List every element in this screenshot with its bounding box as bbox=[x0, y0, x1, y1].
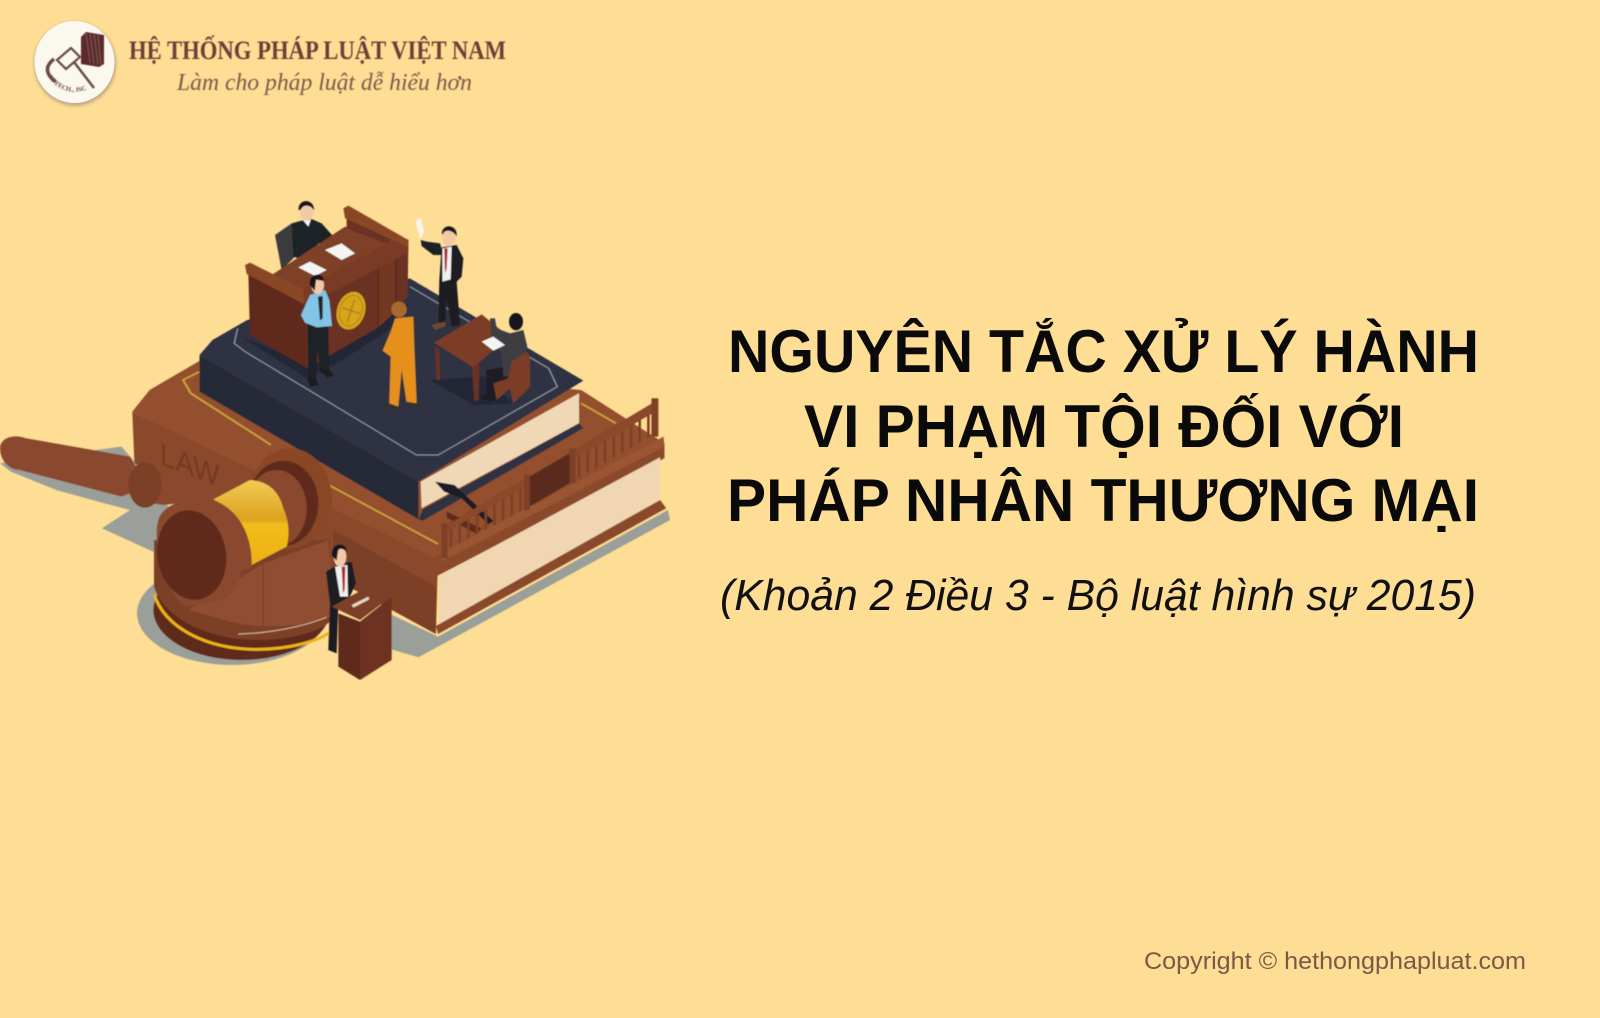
gavel handle bbox=[0, 436, 147, 497]
gavel head bbox=[150, 448, 332, 607]
judge bbox=[275, 201, 335, 270]
title: NGUYÊN TẮC XỬ LÝ HÀNH bbox=[728, 318, 1479, 385]
gavel handle collar bbox=[128, 462, 222, 508]
defence table and lawyer bbox=[430, 313, 530, 405]
title: PHÁP NHÂN THƯƠNG MẠI bbox=[727, 467, 1479, 534]
upper navy book bbox=[200, 278, 583, 534]
copyright: Copyright © hethongphapluat.com bbox=[1144, 948, 1526, 975]
defendant in orange bbox=[383, 301, 417, 410]
subtitle: (Khoản 2 Điều 3 - Bộ luật hình sự 2015) bbox=[720, 571, 1476, 620]
security guard bbox=[301, 275, 334, 387]
prosecutor bbox=[415, 217, 463, 330]
scales emblem bbox=[332, 288, 370, 333]
illustration: courtroom on law books with gavel bbox=[0, 201, 670, 680]
courtroom scene on the navy book bbox=[242, 201, 530, 410]
gavel and speaker bbox=[128, 436, 393, 680]
spine title: LAW bbox=[160, 436, 219, 494]
bench shadow bbox=[242, 303, 410, 378]
books and railing bbox=[0, 278, 670, 665]
title: VI PHẠM TỘI ĐỐI VỚI bbox=[804, 393, 1404, 460]
shadows bbox=[0, 447, 670, 665]
sound block bbox=[153, 540, 333, 660]
judge bench bbox=[245, 206, 408, 368]
lower law book bbox=[132, 358, 666, 634]
logo tagline: Làm cho pháp luật dễ hiểu hơn bbox=[176, 70, 472, 96]
logo badge bbox=[32, 20, 118, 108]
title bbox=[727, 318, 1479, 534]
papers bbox=[325, 243, 355, 260]
lectern speaker bbox=[326, 545, 356, 653]
logo organisation name: HỆ THỐNG PHÁP LUẬT VIỆT NAM bbox=[129, 36, 506, 65]
lectern bbox=[332, 588, 393, 680]
logo badge: 4.0 TECH., JSC bbox=[50, 74, 86, 94]
railing bbox=[440, 398, 664, 562]
